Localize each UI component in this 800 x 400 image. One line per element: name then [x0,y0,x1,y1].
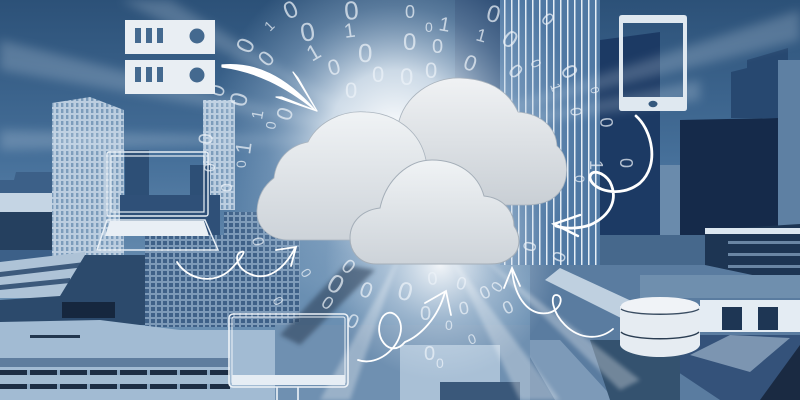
binary digits stream: 0 [202,163,219,172]
binary digits stream: 0 [337,255,359,279]
lower mid buildings [275,325,530,400]
front cloud [350,160,519,264]
band windows two [0,384,230,389]
icon: server rack [125,20,215,94]
dark roof [760,345,800,400]
roof strip [545,268,640,320]
binary digits stream: 0 [400,64,413,91]
far right grid tower [778,60,800,225]
binary digits stream: 0 [548,249,570,265]
small tower right [660,165,680,235]
solar panels light [690,335,790,372]
far left dark block [0,212,52,250]
soft streaks [0,0,800,150]
binary digits stream: 1 [586,160,606,170]
binary digits stream: 0 [537,9,558,30]
binary digits stream: 0 [527,57,545,71]
laptop backdrop [120,195,220,235]
icon: database cylinder [620,297,700,357]
binary digits stream: 0 [325,54,343,81]
binary digits stream: 0 [405,2,415,22]
foliage left [0,255,150,325]
binary digits stream: 0 [425,58,437,83]
binary digits stream: 0 [403,29,416,56]
binary digits stream: 0 [394,275,416,308]
binary digits stream: 0 [297,266,315,280]
lower glow [325,150,555,380]
binary digits stream: 0 [503,60,527,83]
binary digits stream: 0 [596,117,617,128]
bottom left long building [0,320,275,400]
solar roof [660,335,800,400]
top glow [210,0,580,320]
towers behind laptop [125,150,210,195]
dark block right [680,118,778,240]
far left roof [0,193,52,215]
office building right [705,224,800,285]
binary digits stream: 0 [318,292,337,314]
trees bottom [440,382,520,400]
binary digits stream: 0 [497,25,523,55]
second tower [203,100,235,210]
binary digits stream: 0 [253,46,280,71]
back right cloud [398,78,567,205]
binary digits stream: 0 [425,19,433,35]
left tower [52,97,124,280]
lower right complex [530,265,800,400]
binary digits stream: 0 [206,82,231,100]
lower beams [320,255,640,400]
binary digits stream: 0 [271,104,299,124]
binary digits stream: 0 [372,62,384,87]
trees beside road [590,340,680,400]
arrow: monitor to cloud [358,291,451,361]
binary digits stream: 0 [269,294,287,308]
binary digits stream: 0 [225,90,254,110]
binary digits stream: 0 [487,278,506,295]
dark tower behind tablet [600,32,660,235]
binary digits stream: 1 [474,25,489,46]
binary digits stream: 0 [466,330,479,348]
binary digits stream: 0 [457,298,471,319]
binary digits stream: 0 [248,236,266,248]
left cloud [257,112,436,240]
binary digits stream: 0 [420,303,431,325]
arrow: tablet to cloud [554,116,652,236]
arrow: database to cloud [504,268,613,337]
binary digits stream: 1 [261,17,278,34]
centre tall strip [224,212,300,322]
office roof [705,228,800,234]
binary digits stream: 0 [195,132,218,145]
binary digits stream: 0 [587,85,602,96]
centre grid building [145,235,295,327]
band windows one [0,370,230,375]
arrow: laptop to cloud [177,247,296,279]
binary digits stream: 1 [230,140,257,156]
trees right [600,235,705,270]
office window lines [728,241,800,268]
white block right [700,300,800,332]
band one [0,358,230,367]
binary digits stream: 0 [432,36,443,58]
striped tower [500,0,600,265]
binary digits stream: 0 [572,175,588,183]
binary digits stream: 0 [343,310,362,334]
arrow: server to cloud [222,65,317,111]
binary digits stream [195,0,636,371]
binary digits stream: 0 [427,268,438,289]
binary digits stream: 0 [358,38,372,68]
binary digits stream: 1 [249,109,268,121]
binary digits stream: 0 [566,106,584,117]
binary digits stream: 0 [556,60,583,83]
binary digits stream: 0 [454,273,469,294]
top centre dark building [455,0,500,130]
tall towers right [731,48,788,118]
lower light block [400,345,500,400]
binary digits stream: 1 [302,39,325,66]
binary digits stream: 0 [262,120,279,131]
dark podium [62,302,115,318]
binary digits stream: 0 [445,317,453,333]
slab far left [0,252,85,298]
binary digits stream: 0 [460,49,480,77]
icon: tablet [619,15,687,111]
binary digits stream: 0 [483,0,503,29]
upper roofs right [640,275,800,298]
binary digits stream: 0 [231,34,261,58]
dark wedge below the clouds [280,265,375,345]
binary digits stream: 0 [322,267,350,300]
binary digits stream: 0 [424,343,435,365]
slab window lines [0,262,85,290]
binary digits stream: 0 [499,296,517,319]
binary digits stream: 0 [476,281,494,304]
binary digits stream: 1 [547,81,565,94]
clouds [257,78,567,264]
binary digits stream: 0 [616,158,636,168]
far left low buildings [0,172,52,262]
binary digits stream: 0 [219,183,236,192]
binary digits stream: 0 [436,355,444,371]
binary digits stream: 1 [343,20,357,43]
binary digits stream: 0 [233,160,249,168]
icon: desktop monitor [229,314,348,400]
binary digits stream: 0 [345,78,357,103]
road [520,340,615,400]
windows [722,307,778,330]
icon: laptop [97,152,218,250]
binary digits stream: 0 [519,239,540,254]
binary digits stream: 0 [356,276,376,304]
roof block [30,335,80,338]
binary digits stream: 1 [437,13,452,37]
binary digits stream: 0 [298,16,317,48]
